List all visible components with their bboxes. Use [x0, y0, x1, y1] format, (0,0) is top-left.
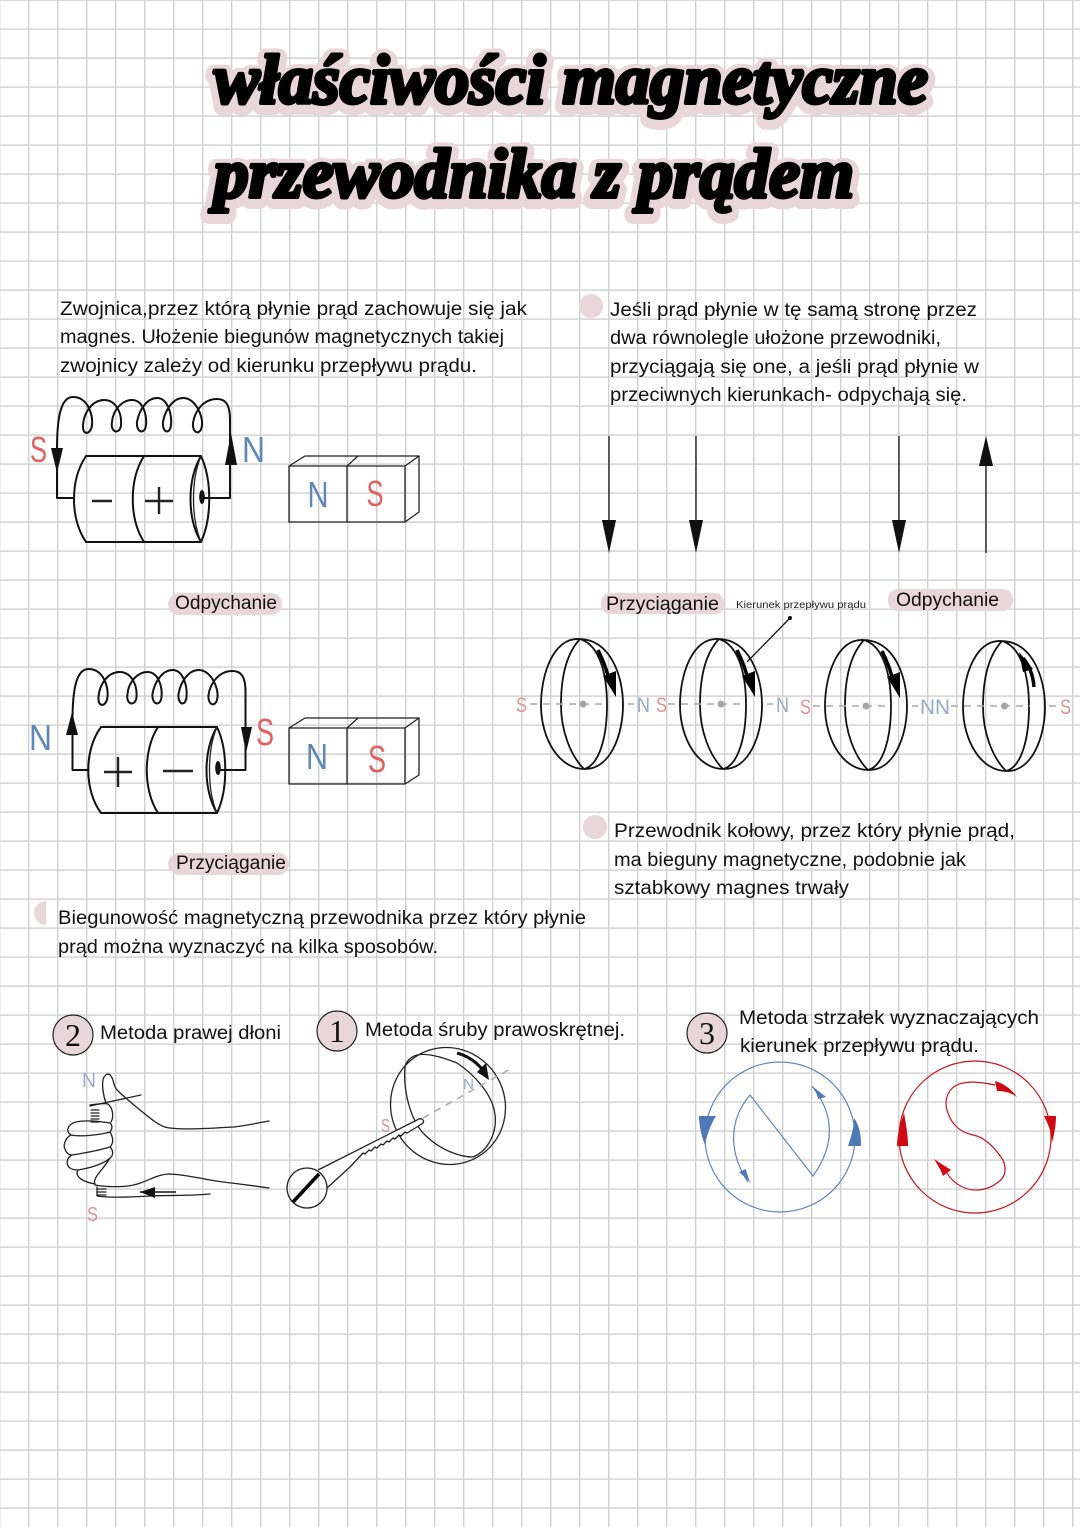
bullet: polarity	[34, 901, 46, 925]
text block: polarity: prąd można wyznaczyć na kilka sposobów.	[58, 937, 438, 958]
pole S: S	[381, 1116, 390, 1136]
title: właściwości magnetyczne	[214, 45, 928, 122]
ring 3: S	[800, 696, 811, 719]
ring 1: S	[516, 694, 527, 717]
screw slot	[293, 1174, 319, 1202]
pole N: N	[463, 1076, 474, 1093]
label: Przyciąganie right: Przyciąganie	[606, 594, 719, 615]
diagram: bar magnet 2: N	[306, 736, 328, 777]
wire top	[90, 1095, 141, 1106]
battery	[88, 727, 225, 813]
arrow: up	[66, 712, 78, 735]
ring 2: S	[656, 694, 667, 717]
title: przewodnika z prądem	[209, 136, 854, 213]
screw shaft	[318, 1119, 424, 1188]
pole S: S	[30, 429, 47, 470]
label: Kierunek przepływu prądu	[736, 599, 866, 662]
label: Przyciąganie: Przyciąganie	[176, 853, 286, 874]
battery	[74, 456, 209, 542]
wire bottom	[97, 1187, 210, 1197]
text block: circular conductor: Przewodnik kołowy, przez który płynie prąd,	[614, 821, 1015, 842]
axis dashes	[423, 1068, 512, 1118]
text block: solenoid intro: magnes. Ułożenie biegunów magnetycznych takiej	[60, 327, 504, 348]
text block: parallel conductors: dwa równolegle ułożone przewodniki,	[610, 328, 941, 349]
illustration: right hand	[64, 1070, 269, 1226]
coil wire	[72, 669, 246, 770]
text block: circular conductor: sztabkowy magnes trwały	[614, 878, 850, 899]
arrow: parallel down 1	[602, 436, 616, 553]
title	[209, 42, 928, 216]
label: Odpychanie right: Odpychanie	[896, 590, 999, 611]
label: Kierunek przepływu prądu: Kierunek przepływu prądu	[736, 599, 866, 611]
arrow: up	[225, 433, 237, 465]
text block: solenoid intro: Zwojnica,przez którą płynie prąd zachowuje się jak	[60, 299, 528, 320]
ring 1: N	[637, 694, 650, 717]
method 2 heading: Metoda prawej dłoni	[100, 1023, 281, 1044]
arrow: down	[51, 448, 63, 473]
method 3 heading: kierunek przepływu prądu.	[740, 1036, 979, 1057]
current arrow	[140, 1191, 176, 1193]
diagram: bar magnet 2: S	[368, 739, 386, 781]
plus sign	[145, 487, 173, 514]
screw head	[287, 1168, 327, 1208]
method 3 heading: Metoda strzałek wyznaczających	[739, 1008, 1039, 1029]
text block: parallel conductors: przeciwnych kierunkach- odpychają się.	[610, 385, 967, 406]
coil windings	[91, 1110, 106, 1195]
label: Odpychanie: Odpychanie	[175, 593, 277, 614]
text block: circular conductor	[614, 821, 1015, 899]
method 2 heading: 2	[65, 1017, 81, 1053]
arrow: parallel down 2	[689, 436, 703, 553]
arrowheads	[699, 1086, 861, 1183]
pole S: S	[87, 1204, 98, 1226]
ring 4	[951, 641, 1071, 771]
minus sign	[92, 500, 112, 502]
ring 1	[516, 639, 650, 769]
diagram: circular conductor rings	[516, 639, 1071, 771]
coil wire	[57, 397, 230, 498]
text block: parallel conductors: Jeśli prąd płynie w tę samą stronę przez	[610, 300, 977, 321]
text block: solenoid intro: zwojnicy zależy od kierunku przepływu prądu.	[60, 356, 477, 377]
arrow: antiparallel down	[892, 436, 906, 553]
fingers	[64, 1121, 113, 1184]
arrow: antiparallel up	[979, 436, 993, 553]
thumb base	[90, 1104, 113, 1122]
diagram: battery and coil, attraction	[29, 669, 274, 813]
bullet: parallel conductors	[579, 294, 603, 318]
diagram: bar magnet 1	[289, 456, 419, 522]
thumb and wrist upper outline	[103, 1074, 269, 1129]
pole N: N	[242, 429, 265, 470]
pole N: N	[82, 1070, 96, 1092]
ring 2: N	[776, 694, 789, 717]
method 2 heading	[53, 1015, 281, 1055]
diagram: bar magnet 1: N	[308, 474, 328, 515]
ring 3	[800, 640, 950, 770]
minus sign	[163, 770, 193, 772]
ring	[369, 1026, 527, 1186]
ring 3: NN	[920, 696, 950, 719]
rotation arrow	[457, 1053, 482, 1069]
forearm lower outline	[95, 1174, 269, 1188]
method 1 heading	[317, 1011, 625, 1051]
diagram: battery and coil, repulsion	[30, 397, 265, 542]
title: właściwości magnetyczne	[214, 42, 928, 119]
pole N: N	[29, 717, 52, 758]
ring 4: S	[1060, 696, 1071, 719]
arrow: down	[241, 727, 252, 753]
illustration: right-hand screw	[287, 1026, 527, 1208]
bullet: circular conductor	[583, 815, 607, 839]
arrowheads	[897, 1081, 1056, 1176]
method 3 heading: 3	[699, 1015, 715, 1051]
text block: parallel conductors: przyciągają się one, a jeśli prąd płynie w	[610, 357, 979, 378]
diagram: S pole with arrows	[897, 1061, 1056, 1213]
diagram: bar magnet 1: S	[366, 473, 384, 514]
ring 2	[656, 639, 789, 769]
text block: polarity	[58, 908, 586, 958]
method 1 heading: 1	[329, 1013, 345, 1049]
text block: parallel conductors	[610, 300, 979, 406]
text block: polarity: Biegunowość magnetyczną przewodnika przez który płynie	[58, 908, 586, 929]
method 1 heading: Metoda śruby prawoskrętnej.	[365, 1020, 625, 1041]
title: przewodnika z prądem	[209, 139, 854, 216]
method 3 heading	[687, 1008, 1039, 1057]
pole S: S	[256, 712, 274, 754]
text block: circular conductor: ma bieguny magnetyczne, podobnie jak	[614, 850, 967, 871]
diagram: bar magnet 2	[289, 718, 419, 784]
plus sign	[104, 757, 132, 787]
text block: solenoid intro	[60, 299, 528, 377]
diagram: N pole with arrows	[699, 1062, 861, 1212]
